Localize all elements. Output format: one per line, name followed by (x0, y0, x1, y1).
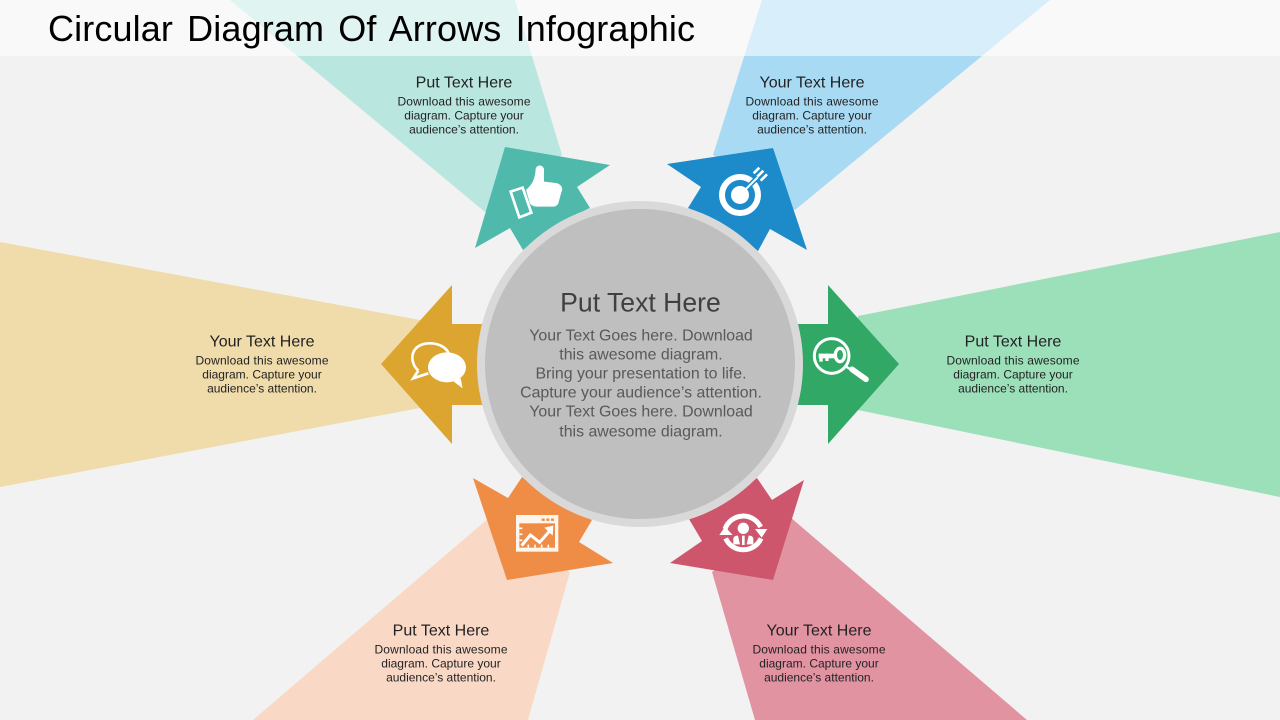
text block: pink: diagram. Capture your (759, 656, 879, 670)
center text (520, 288, 762, 440)
center text: Capture your audience’s attention. (520, 384, 762, 402)
text block: yellow (196, 334, 329, 396)
text block: peach: Download this awesome (374, 642, 508, 656)
arrow: yellow (381, 285, 490, 444)
text block: green: diagram. Capture your (953, 368, 1073, 382)
title band (0, 0, 1280, 56)
title: Circular Diagram Of Arrows Infographic (48, 8, 695, 49)
text block: yellow: Download this awesome (196, 354, 329, 368)
text block: green (946, 334, 1080, 396)
arrow: blue (667, 148, 807, 251)
text block: teal: Put Text Here (416, 74, 512, 92)
center text: Your Text Goes here. Download (529, 404, 753, 420)
center circle (477, 201, 803, 527)
icon: people cycle (719, 516, 767, 550)
beam: pink (712, 517, 1027, 720)
text block: green: Put Text Here (965, 334, 1061, 350)
text block: blue: audience’s attention. (757, 122, 867, 136)
text block: blue: diagram. Capture your (752, 108, 872, 122)
icon: thumbs up (511, 165, 562, 217)
arrow: green (790, 285, 899, 444)
text block: teal: Download this awesome (398, 94, 531, 108)
text block: pink: Download this awesome (752, 642, 886, 656)
text block: pink: audience’s attention. (764, 670, 874, 684)
text block: teal: diagram. Capture your (404, 108, 524, 122)
text block: yellow: diagram. Capture your (202, 368, 322, 382)
icon: speech bubbles (412, 343, 466, 388)
text block: pink (752, 622, 886, 684)
center text: Your Text Goes here. Download (529, 328, 753, 344)
text block: blue (746, 74, 879, 136)
text block: green: Download this awesome (946, 354, 1080, 368)
text block: peach: audience’s attention. (386, 670, 496, 684)
text block: yellow: Your Text Here (210, 334, 315, 350)
center text: this awesome diagram. (559, 346, 723, 364)
text block: blue: Your Text Here (760, 74, 865, 92)
beam: teal (230, 0, 562, 212)
arrow: teal (475, 147, 610, 250)
icon: key magnifier (814, 339, 866, 379)
arrow: pink (670, 478, 804, 580)
text block: pink: Your Text Here (767, 622, 872, 640)
text block: green: audience’s attention. (958, 382, 1068, 396)
text block: yellow: audience’s attention. (207, 382, 317, 396)
text block: peach: Put Text Here (393, 622, 489, 640)
center text: Put Text Here (560, 288, 721, 318)
text block: teal (398, 74, 531, 136)
beam: yellow (0, 242, 420, 487)
text block: blue: Download this awesome (746, 94, 879, 108)
beam: peach (253, 517, 570, 720)
center text: Bring your presentation to life. (535, 366, 747, 382)
icon: target (722, 168, 767, 213)
beam: green (858, 232, 1280, 497)
center text: this awesome diagram. (559, 424, 723, 440)
icon: chart window (516, 515, 558, 552)
arrow: orange (473, 477, 613, 580)
text block: peach: diagram. Capture your (381, 656, 501, 670)
beam: blue (713, 0, 1050, 210)
text block: teal: audience’s attention. (409, 122, 519, 136)
text block: peach (374, 622, 508, 684)
